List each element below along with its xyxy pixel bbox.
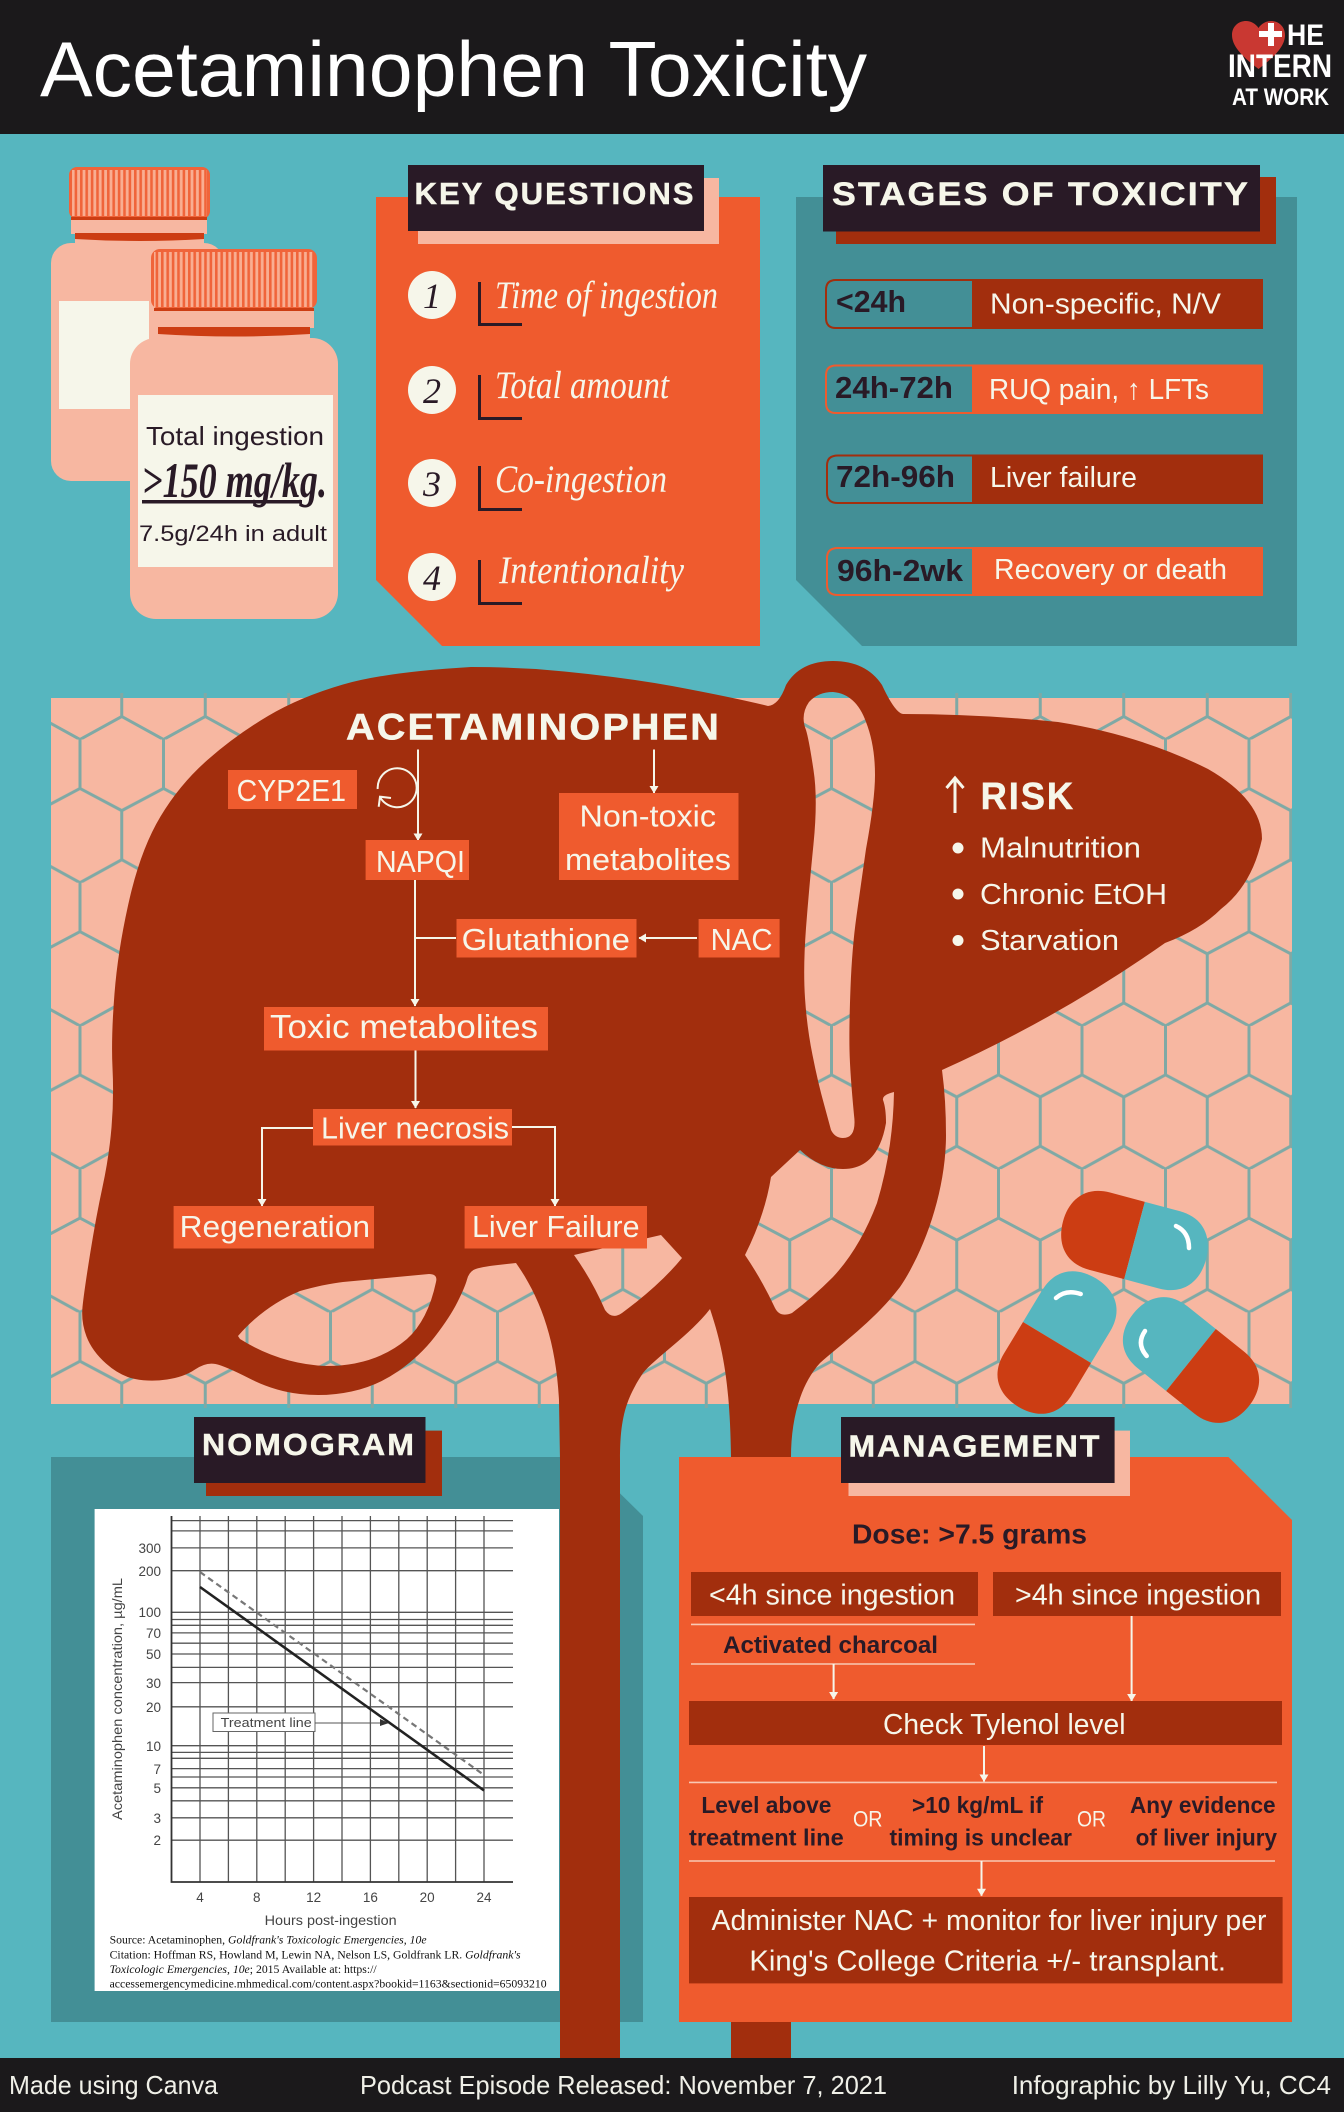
question 4: Intentionality (498, 549, 685, 592)
y axis tick labels: 5 (153, 1781, 161, 1796)
panel: key questions (376, 165, 760, 646)
box: over 4h since ingestion (993, 1572, 1281, 1616)
box: check tylenol level: Check Tylenol level (883, 1709, 1126, 1741)
source citation: Citation: Hoffman RS, Howland M, Lewin NA, Nelson LS, Goldfrank LR. Goldfrank's (110, 1949, 521, 1961)
y axis tick labels: 2 (153, 1833, 161, 1848)
arrow: NAC to glutathione (639, 937, 697, 939)
arrow: over 4h to level check (1131, 1616, 1133, 1701)
text: activated charcoal (691, 1624, 975, 1664)
heading: nomogram: NOMOGRAM (202, 1427, 416, 1462)
y axis tick labels: 10 (146, 1739, 161, 1754)
footer bar (0, 2058, 1344, 2112)
source citation (110, 1935, 547, 1990)
label: glutathione: Glutathione (462, 922, 630, 957)
arrow: acetaminophen to non-toxic metabolites (653, 750, 655, 793)
text: activated charcoal: Activated charcoal (723, 1632, 938, 1659)
source citation: Toxicologic Emergencies, 10e; 2015 Available at: https:// (110, 1964, 377, 1976)
footer: credit: Infographic by Lilly Yu, CC4 (1012, 2070, 1331, 2100)
criteria row: of liver injury (1136, 1824, 1277, 1850)
icon: up arrow (946, 778, 964, 813)
logo: The Intern at Work: HE (1287, 19, 1324, 52)
y axis tick labels: 3 (153, 1811, 161, 1826)
icon: pill two (984, 1258, 1130, 1427)
panel: nomogram (51, 1417, 643, 2022)
x axis tick labels: 16 (363, 1890, 378, 1905)
panel: management (679, 1417, 1292, 2022)
stage row: 72h to 96h (827, 454, 1263, 504)
question 2 (408, 364, 670, 418)
arrow: charcoal to level check (833, 1664, 835, 1699)
label: liver necrosis: Liver necrosis (321, 1110, 509, 1146)
callout: treatment line: Treatment line (221, 1715, 312, 1730)
chart: acetaminophen nomogram (95, 1509, 559, 1991)
question 4 (408, 549, 685, 604)
box: check tylenol level (689, 1701, 1282, 1745)
label: non-toxic metabolites (559, 793, 738, 880)
box: under 4h since ingestion: <4h since ingestion (709, 1580, 955, 1612)
criteria row: Level above (701, 1792, 831, 1818)
criteria row (689, 1782, 1277, 1861)
stage row: 96h to 2wk: 96h-2wk (837, 553, 964, 588)
y axis tick labels: 20 (146, 1700, 161, 1715)
box: over 4h since ingestion: >4h since ingestion (1015, 1580, 1261, 1612)
risk item: malnutrition: Malnutrition (980, 832, 1141, 864)
header bar (0, 0, 1344, 134)
criteria row: timing is unclear (890, 1824, 1072, 1850)
logo: The Intern at Work (1228, 19, 1332, 111)
panel: stages of toxicity (796, 165, 1297, 646)
arrow: criteria to treatment (980, 1861, 982, 1896)
arrow: necrosis to liver failure (512, 1127, 555, 1206)
heading: stages of toxicity: STAGES OF TOXICITY (832, 176, 1250, 212)
y axis tick labels: 200 (138, 1564, 161, 1579)
callout: treatment line (213, 1713, 389, 1732)
text: total ingestion: Total ingestion (146, 421, 324, 451)
label: NAPQI: NAPQI (376, 844, 465, 879)
arrow: NAPQI to toxic metabolites with glutathione branch (415, 880, 456, 1006)
heading: management: MANAGEMENT (848, 1428, 1102, 1464)
heading: key questions (408, 165, 719, 244)
x axis tick labels: 20 (420, 1890, 435, 1905)
risk item: starvation: Starvation (980, 925, 1119, 957)
stage row: under 24h (826, 279, 1263, 329)
box: administer NAC: Administer NAC + monitor for liver injury per (712, 1905, 1267, 1937)
question 3 (408, 458, 667, 510)
y axis tick labels: 50 (146, 1647, 161, 1662)
question 4: 4 (423, 558, 441, 598)
stage row: 72h to 96h: Liver failure (990, 462, 1137, 494)
stage row: under 24h: <24h (836, 284, 906, 319)
question 2: 2 (423, 371, 441, 411)
criteria row: Any evidence (1130, 1792, 1276, 1818)
question 3: 3 (422, 464, 441, 504)
stage row: 24h to 72h: RUQ pain, ↑ LFTs (989, 374, 1209, 406)
label: CYP2E1: CYP2E1 (237, 773, 346, 808)
arrow: acetaminophen to NAPQI (417, 750, 419, 840)
heading: risk: RISK (981, 776, 1075, 818)
y axis title: Acetaminophen concentration, µg/mL (109, 1578, 125, 1820)
y axis tick labels (138, 1541, 161, 1848)
y axis tick labels: 70 (146, 1626, 161, 1641)
stage row: 24h to 72h: 24h-72h (835, 370, 953, 405)
criteria row: >10 kg/mL if (912, 1792, 1043, 1818)
stage row: 96h to 2wk (827, 547, 1263, 596)
risk factors list (946, 776, 1167, 957)
heading: key questions: KEY QUESTIONS (414, 176, 696, 211)
question 2: Total amount (495, 364, 670, 407)
x axis tick labels: 12 (306, 1890, 321, 1905)
honeycomb background panel (51, 693, 1292, 1408)
x axis tick labels: 4 (196, 1890, 204, 1905)
y axis tick labels: 30 (146, 1676, 161, 1691)
arrow: level check to criteria (983, 1746, 985, 1782)
x axis tick labels: 8 (253, 1890, 261, 1905)
y axis tick labels: 300 (138, 1541, 161, 1556)
x axis title: Hours post-ingestion (265, 1912, 397, 1928)
icon: cycle arrow (378, 768, 417, 807)
heading: management (841, 1417, 1130, 1496)
icon: pill one (1053, 1183, 1216, 1298)
stage row: 24h to 72h (826, 364, 1263, 414)
text: adult dose: 7.5g/24h in adult (139, 521, 327, 546)
question 1: Time of ingestion (495, 274, 718, 317)
label: regeneration: Regeneration (180, 1209, 370, 1244)
logo: The Intern at Work: AT WORK (1232, 84, 1330, 111)
footer: release date: Podcast Episode Released: November 7, 2021 (360, 2070, 887, 2100)
title: Acetaminophen Toxicity (40, 25, 867, 113)
box: under 4h since ingestion (691, 1572, 978, 1616)
label: toxic metabolites: Toxic metabolites (270, 1008, 538, 1045)
question 1 (408, 271, 718, 324)
risk item: chronic EtOH: Chronic EtOH (980, 879, 1167, 911)
criteria row: OR (1077, 1806, 1106, 1831)
label: non-toxic metabolites: metabolites (565, 842, 731, 877)
source citation: Source: Acetaminophen, Goldfrank's Toxicologic Emergencies, 10e (110, 1935, 427, 1947)
question 1: 1 (423, 276, 441, 316)
arrow: necrosis to regeneration (262, 1128, 313, 1206)
question 3: Co-ingestion (495, 458, 667, 501)
icon: back pill bottle (51, 167, 224, 481)
source citation: accessemergencymedicine.mhmedical.com/content.aspx?bookid=1163&sectionid=65093210 (110, 1978, 547, 1990)
text: dose threshold: Dose: >7.5 grams (852, 1518, 1087, 1549)
label: non-toxic metabolites: Non-toxic (580, 799, 716, 834)
y axis tick labels: 100 (138, 1605, 161, 1620)
label: NAC: NAC (711, 922, 773, 957)
criteria row: treatment line (689, 1824, 844, 1850)
x axis tick labels: 24 (476, 1890, 492, 1905)
icon: pill three (1108, 1283, 1274, 1437)
arrow: toxic metabolites to liver necrosis (414, 1050, 416, 1108)
stage row: 72h to 96h: 72h-96h (836, 459, 955, 494)
logo: The Intern at Work: INTERN (1228, 48, 1332, 84)
y axis tick labels: 7 (153, 1762, 161, 1777)
icon: front pill bottle with dose label (130, 249, 338, 619)
liver pathway flowchart (174, 706, 780, 1248)
x axis tick labels (196, 1890, 492, 1905)
liver illustration with hepatic veins (82, 661, 1262, 2058)
footer: made using canva: Made using Canva (9, 2070, 219, 2100)
heading: nomogram (194, 1417, 442, 1496)
heading: stages of toxicity (823, 165, 1276, 244)
label: liver failure: Liver Failure (472, 1209, 640, 1244)
stage row: 96h to 2wk: Recovery or death (994, 554, 1227, 586)
heading: acetaminophen: ACETAMINOPHEN (346, 706, 721, 748)
box: administer NAC: King's College Criteria +/- transplant. (749, 1945, 1226, 1977)
box: administer NAC (689, 1897, 1283, 1983)
stage row: under 24h: Non-specific, N/V (990, 288, 1222, 320)
criteria row: OR (853, 1806, 882, 1831)
text: dose threshold: >150 mg/kg. (142, 452, 327, 508)
